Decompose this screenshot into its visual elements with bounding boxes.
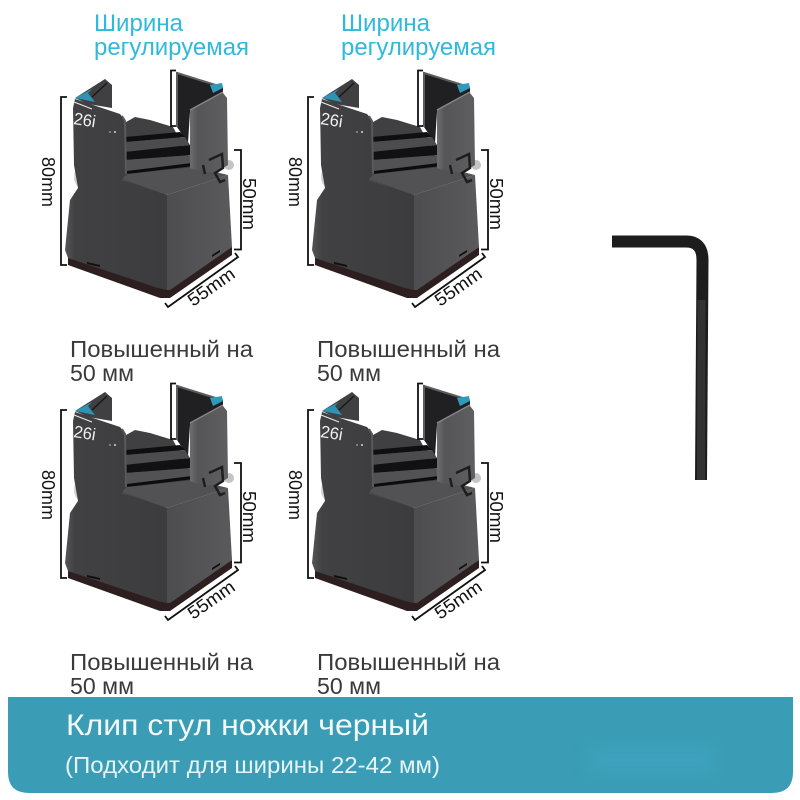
dimension labels: 80mm bbox=[285, 157, 305, 207]
dimension labels: 55mm bbox=[184, 576, 239, 623]
caption: raised by 50 mm bbox=[70, 649, 253, 699]
clip product illustration bbox=[61, 384, 241, 620]
dimension labels: 80mm bbox=[38, 157, 58, 207]
product panel: top right bbox=[285, 10, 506, 386]
heading: adjustable width: Ширина bbox=[94, 10, 184, 37]
caption: raised by 50 mm bbox=[70, 336, 253, 386]
caption: raised by 50 mm: Повышенный на bbox=[317, 649, 500, 675]
dimension labels: 55mm bbox=[431, 576, 486, 623]
heading: adjustable width bbox=[341, 10, 496, 61]
caption: raised by 50 mm: Повышенный на bbox=[70, 649, 253, 675]
dimension labels bbox=[285, 109, 506, 310]
banner title: Клип стул ножки черный bbox=[66, 709, 429, 742]
dimension labels: 80mm bbox=[38, 470, 58, 520]
caption: raised by 50 mm bbox=[317, 336, 500, 386]
dimension labels: 55mm bbox=[431, 263, 486, 310]
caption: raised by 50 mm: 50 мм bbox=[317, 360, 381, 386]
dimension labels: 50mm bbox=[239, 491, 259, 543]
dimension labels: 26i bbox=[72, 109, 97, 131]
heading: adjustable width: регулируемая bbox=[341, 34, 496, 61]
clip product illustration bbox=[61, 70, 241, 307]
dimension labels: 50mm bbox=[239, 178, 259, 230]
dimension labels: 26i bbox=[319, 422, 344, 444]
heading: adjustable width: регулируемая bbox=[94, 34, 249, 61]
dimension labels: 80mm bbox=[285, 470, 305, 520]
dimension labels: 50mm bbox=[486, 178, 506, 230]
caption: raised by 50 mm: Повышенный на bbox=[317, 336, 500, 362]
product panel: bottom right bbox=[285, 384, 506, 699]
dimension labels bbox=[38, 422, 259, 623]
caption: raised by 50 mm: 50 мм bbox=[70, 673, 134, 699]
dimension labels bbox=[285, 422, 506, 623]
caption: raised by 50 mm bbox=[317, 649, 500, 699]
caption: raised by 50 mm: 50 мм bbox=[317, 673, 381, 699]
banner subtitle: (Подходит для ширины 22-42 мм) bbox=[65, 752, 440, 778]
clip product illustration bbox=[308, 70, 488, 307]
banner bbox=[8, 697, 793, 793]
dimension labels: 55mm bbox=[184, 263, 239, 310]
clip product illustration bbox=[308, 384, 488, 620]
product panel: bottom left bbox=[38, 384, 259, 699]
dimension labels bbox=[38, 109, 259, 310]
heading: adjustable width bbox=[94, 10, 249, 61]
dimension labels: 26i bbox=[319, 109, 344, 131]
caption: raised by 50 mm: 50 мм bbox=[70, 360, 134, 386]
dimension labels: 50mm bbox=[486, 491, 506, 543]
product panel: top left bbox=[38, 10, 259, 386]
caption: raised by 50 mm: Повышенный на bbox=[70, 336, 253, 362]
heading: adjustable width: Ширина bbox=[341, 10, 431, 37]
icon: hex key bbox=[612, 242, 702, 480]
dimension labels: 26i bbox=[72, 422, 97, 444]
